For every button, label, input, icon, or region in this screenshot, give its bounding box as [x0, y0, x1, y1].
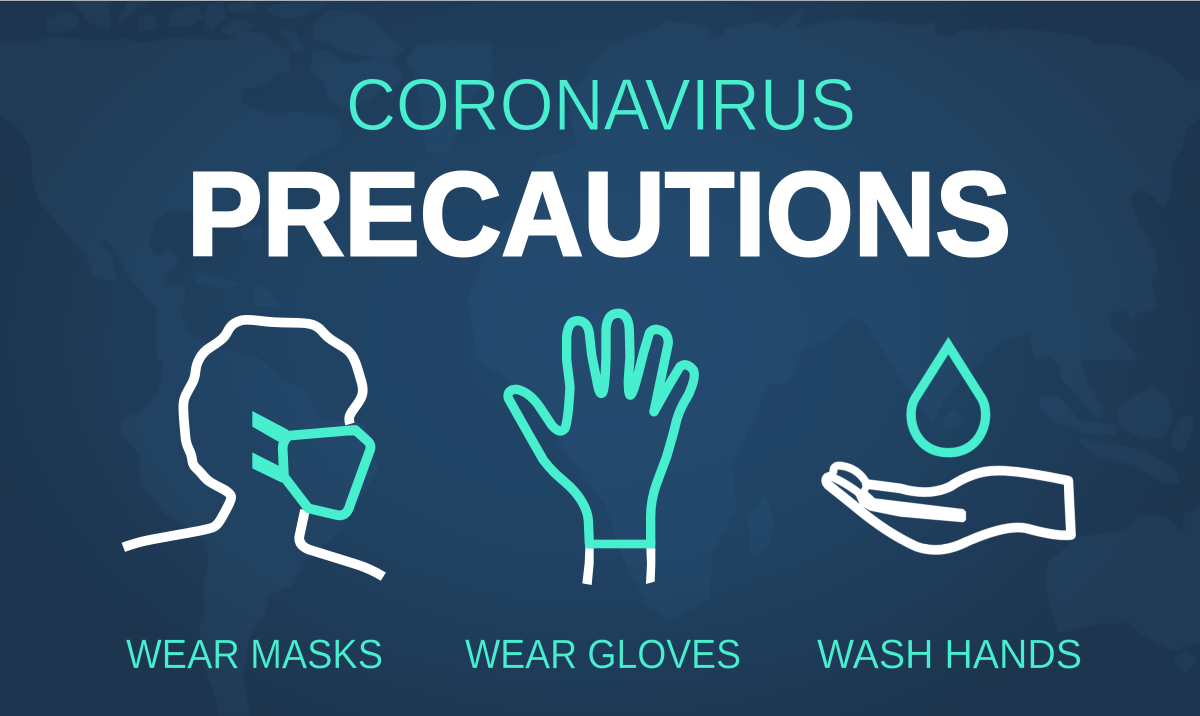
- neck front: [299, 510, 383, 577]
- glove outline: [508, 313, 668, 543]
- fingertip upper: [833, 466, 865, 481]
- water drop: [911, 346, 986, 453]
- icon: head with mask: [123, 320, 383, 577]
- mask straps: [252, 411, 290, 483]
- thumb: [856, 483, 966, 522]
- glove little finger: [651, 365, 694, 543]
- icon: water drop and hand: [826, 346, 1071, 550]
- label: wear gloves: WEAR GLOVES: [465, 631, 741, 677]
- fingertip: [826, 476, 863, 497]
- sleeve left: [582, 548, 594, 585]
- mask: [283, 430, 371, 515]
- title: coronavirus: CORONAVIRUS: [346, 65, 856, 146]
- label: wear masks: WEAR MASKS: [126, 631, 383, 677]
- sleeve right: [646, 548, 655, 584]
- icon: glove: [508, 313, 694, 585]
- label: wash hands: WASH HANDS: [817, 631, 1082, 677]
- glove cuff band: [585, 540, 655, 548]
- title: precautions: PRECAUTIONS: [187, 148, 1011, 281]
- open hand: [826, 471, 1071, 550]
- head outline: [123, 320, 363, 547]
